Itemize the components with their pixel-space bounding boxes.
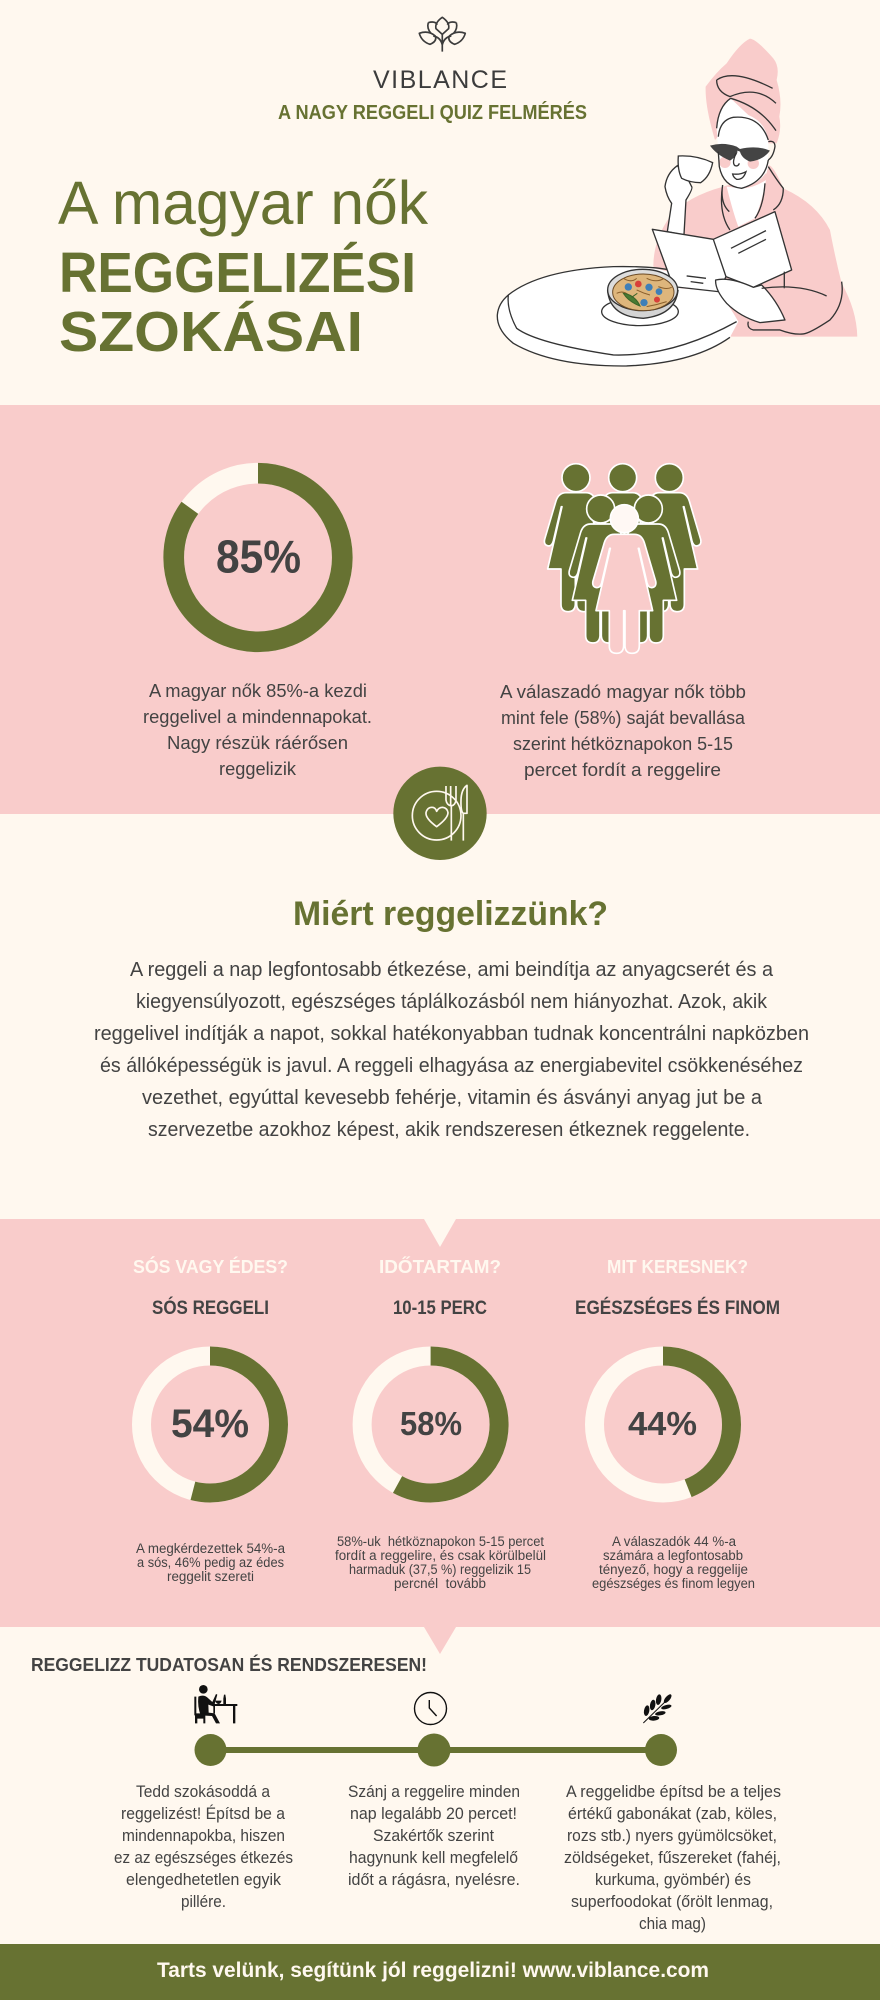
column headings: answers: 10-15 PERC <box>393 1298 487 1319</box>
text block: what to eat: superfoodokat (őrölt lenmag, <box>571 1893 773 1911</box>
title: SZOKÁSAI <box>59 300 363 364</box>
text block: 85% description: reggelivel a mindennapokat. <box>143 707 372 727</box>
text block: what to eat: A reggelidbe építsd be a teljes <box>566 1783 781 1801</box>
column headings: questions: SÓS VAGY ÉDES? <box>133 1256 288 1277</box>
caption: 58%: fordít a reggelire, és csak körülbelül <box>335 1548 546 1563</box>
text block: 58% description: percet fordít a reggelire <box>524 760 721 780</box>
caption: 44%: tényező, hogy a reggelije <box>599 1562 748 1577</box>
donut chart: 44% <box>594 1356 732 1493</box>
text block: 85% description: reggelizik <box>219 759 297 779</box>
donut chart: 44%: 44% <box>628 1405 697 1442</box>
text block: take 20 minutes: hagynunk kell megfelelő <box>349 1849 518 1867</box>
timeline <box>194 1734 677 1766</box>
title: A magyar nők <box>58 169 428 237</box>
text block: take 20 minutes: Szánj a reggelire minden <box>348 1783 520 1801</box>
text block: why breakfast paragraph: reggelivel indítják a napot, sokkal hatékonyabban tudnak koncentrálni napközben <box>94 1023 809 1045</box>
icon: person eating at table <box>194 1685 237 1723</box>
cheeks <box>719 157 731 168</box>
text block: take 20 minutes: nap legalább 20 percet! <box>350 1805 517 1823</box>
text block: make it a habit: elengedhetetlen egyik <box>126 1871 282 1889</box>
caption: 44%: egészséges és finom legyen <box>592 1576 755 1591</box>
icon: lotus <box>419 17 465 52</box>
icon: plate with heart and cutlery <box>393 767 487 860</box>
column headings: questions: IDŐTARTAM? <box>379 1256 501 1277</box>
panel: pink survey band <box>0 1219 880 1627</box>
donut chart: 58%: 58% <box>400 1405 462 1442</box>
menu lines <box>687 231 766 283</box>
text block: take 20 minutes: Szakértők szerint <box>373 1827 494 1845</box>
caption: 44% <box>592 1534 755 1591</box>
arrow: cream notch at top of band <box>424 1219 456 1247</box>
text block: why breakfast paragraph: szervezetbe azokhoz képest, akik rendszeresen étkeznek reggelente. <box>148 1119 750 1141</box>
subtitle: A NAGY REGGELI QUIZ FELMÉRÉS <box>278 101 587 124</box>
text block: 58% description: A válaszadó magyar nők több <box>500 682 746 702</box>
text block: make it a habit: Tedd szokásoddá a <box>136 1783 271 1801</box>
caption: 58% <box>335 1534 546 1591</box>
icon: group of women <box>544 464 701 653</box>
caption: 54%: A megkérdezettek 54%-a <box>136 1541 285 1556</box>
bathrobe <box>653 165 857 337</box>
donut chart: 85% <box>174 473 342 642</box>
saucer <box>602 298 678 326</box>
heading: conscious breakfast: REGGELIZZ TUDATOSAN ÉS RENDSZERESEN! <box>31 1654 427 1675</box>
text block: 85% description: Nagy részük ráérősen <box>167 733 348 753</box>
text block: why breakfast paragraph <box>94 959 809 1141</box>
text block: what to eat: zöldségeket, fűszereket (fahéj, <box>564 1849 781 1867</box>
cup <box>678 156 713 183</box>
caption: 58%: percnél tovább <box>394 1576 486 1591</box>
text block: make it a habit: ez az egészséges étkezés <box>114 1849 293 1867</box>
text block: make it a habit: pillére. <box>181 1893 226 1911</box>
text block: why breakfast paragraph: és állóképességük is javul. A reggeli elhagyása az energiabevitel csökkenéséhez <box>100 1055 803 1077</box>
column headings: answers: EGÉSZSÉGES ÉS FINOM <box>575 1297 780 1319</box>
donut chart: 85%: 85% <box>216 530 301 582</box>
text block: what to eat: értékű gabonákat (zab, köles, <box>568 1805 777 1823</box>
text block: 85% description: A magyar nők 85%-a kezdi <box>149 681 367 701</box>
chest <box>727 180 766 227</box>
donut chart: 58% <box>362 1356 499 1493</box>
caption: 54% <box>136 1541 285 1584</box>
column headings: questions <box>133 1256 748 1277</box>
text block: 58% description <box>500 682 746 780</box>
title: REGGELIZÉSI <box>59 241 416 305</box>
column headings: answers: SÓS REGGELI <box>152 1297 269 1319</box>
text block: 58% description: mint fele (58%) saját bevallása <box>501 708 746 728</box>
caption: 54%: reggelit szereti <box>167 1569 254 1584</box>
panel: pink statistics band <box>0 405 880 814</box>
bowl with food <box>608 269 678 318</box>
caption: 58%: harmaduk (37,5 %) reggelizik 15 <box>349 1562 531 1577</box>
lower hand <box>716 279 785 323</box>
donut chart: 54%: 54% <box>171 1402 249 1446</box>
text block: what to eat: rozs stb.) nyers gyümölcsöket, <box>567 1827 777 1845</box>
caption: 54%: a sós, 46% pedig az édes <box>137 1555 284 1570</box>
logo: Viblance <box>373 17 507 94</box>
icon: wheat leaf <box>643 1693 673 1723</box>
title <box>58 169 428 364</box>
text block: take 20 minutes: időt a rágásra, nyelésre. <box>348 1871 520 1889</box>
heading: why breakfast: Miért reggelizzünk? <box>293 895 608 933</box>
footer band <box>0 1944 880 2000</box>
footer band: Tarts velünk, segítünk jól reggelizni! www.viblance.com <box>157 1959 709 1982</box>
column headings: answers <box>152 1297 780 1319</box>
column headings: questions: MIT KERESNEK? <box>607 1256 748 1277</box>
illustration: woman in bathrobe at breakfast table <box>497 39 857 366</box>
caption: 44%: A válaszadók 44 %-a <box>612 1534 736 1549</box>
text block: take 20 minutes <box>348 1783 520 1889</box>
text block: why breakfast paragraph: kiegyensúlyozott, egészséges táplálkozásból nem hiányozhat. Azok, akik <box>136 991 768 1013</box>
text block: 58% description: szerint hétköznapokon 5-15 <box>513 734 733 754</box>
text block: make it a habit: mindennapokba, hiszen <box>122 1827 285 1845</box>
arm with hand <box>665 166 692 235</box>
towel <box>706 39 780 143</box>
caption: 58%: 58%-uk hétköznapokon 5-15 percet <box>337 1534 544 1549</box>
arrow: pink notch below band <box>424 1627 456 1654</box>
text block: why breakfast paragraph: A reggeli a nap legfontosabb étkezése, ami beindítja az anyagcserét és a <box>130 959 774 981</box>
caption: 44%: számára a legfontosabb <box>603 1548 743 1563</box>
text block: what to eat: chia mag) <box>639 1915 706 1933</box>
icon: clock <box>414 1692 446 1724</box>
sunglasses <box>710 144 770 162</box>
table <box>497 267 738 366</box>
brand name: VIBLANCE <box>373 66 507 94</box>
text block: why breakfast paragraph: vezethet, egyúttal kevesebb fehérje, vitamin és ásványi anyag jut be a <box>142 1087 763 1109</box>
text block: make it a habit <box>114 1783 293 1911</box>
text block: 85% description <box>143 681 372 779</box>
donut chart: 54% <box>142 1356 278 1493</box>
text block: what to eat: kurkuma, gyömbér) és <box>595 1871 751 1889</box>
face and robe lines <box>717 76 842 334</box>
text block: what to eat <box>564 1783 781 1933</box>
mouth <box>733 172 746 179</box>
table outline <box>497 267 737 366</box>
text block: make it a habit: reggelizést! Építsd be a <box>121 1804 286 1823</box>
face <box>717 98 768 188</box>
menu <box>652 212 792 292</box>
